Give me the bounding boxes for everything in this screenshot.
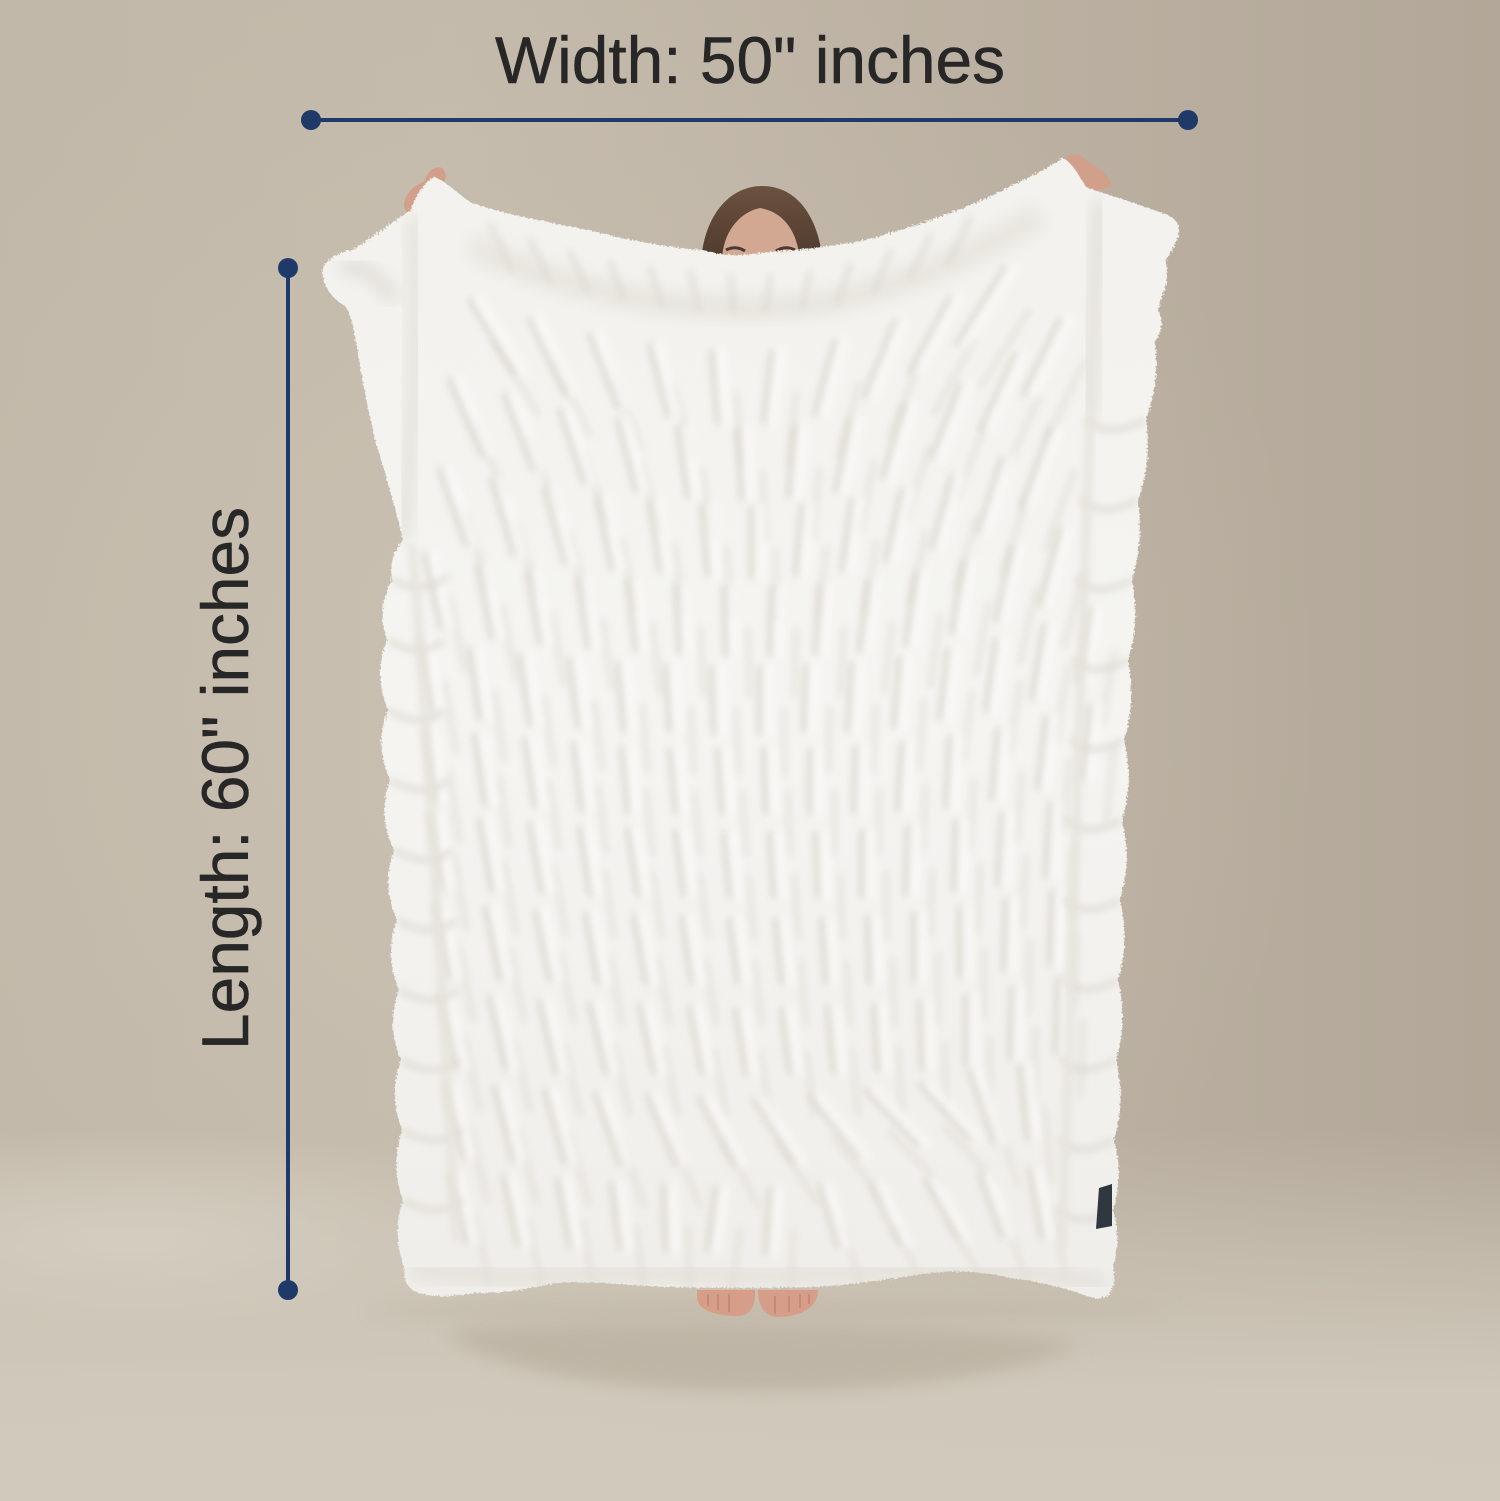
- blanket silhouette: [322, 158, 1179, 1298]
- feet: [697, 1290, 818, 1317]
- face: [722, 208, 800, 262]
- lower floor shading: [410, 1270, 1105, 1284]
- floor glow left: [0, 1130, 550, 1350]
- floor shadow: [370, 1301, 1170, 1392]
- left hand: [404, 167, 446, 217]
- eyes: [726, 248, 795, 251]
- blanket ridges: [340, 200, 1146, 1294]
- person behind blanket: [404, 154, 1112, 1317]
- top fold ridges: [488, 218, 972, 297]
- blanket: [322, 158, 1179, 1298]
- hair: [701, 186, 823, 262]
- length label: Length: 60" inches: [188, 507, 262, 1050]
- offset furrows layer: [444, 310, 1114, 1294]
- width dimension line: [301, 110, 1198, 130]
- floor: [0, 1130, 1500, 1501]
- length dimension line: [278, 258, 298, 1300]
- quilted furrows: [420, 268, 1090, 1252]
- inner border lines: [412, 545, 456, 1240]
- inner fold shading: [404, 216, 415, 540]
- ridge highlights: [429, 268, 1099, 1252]
- left edge scallops: [388, 576, 462, 1210]
- width label: Width: 50" inches: [495, 23, 1005, 97]
- right edge scallops: [1058, 418, 1146, 1220]
- blanket label tag: [1096, 1184, 1112, 1229]
- right hand: [1066, 154, 1112, 192]
